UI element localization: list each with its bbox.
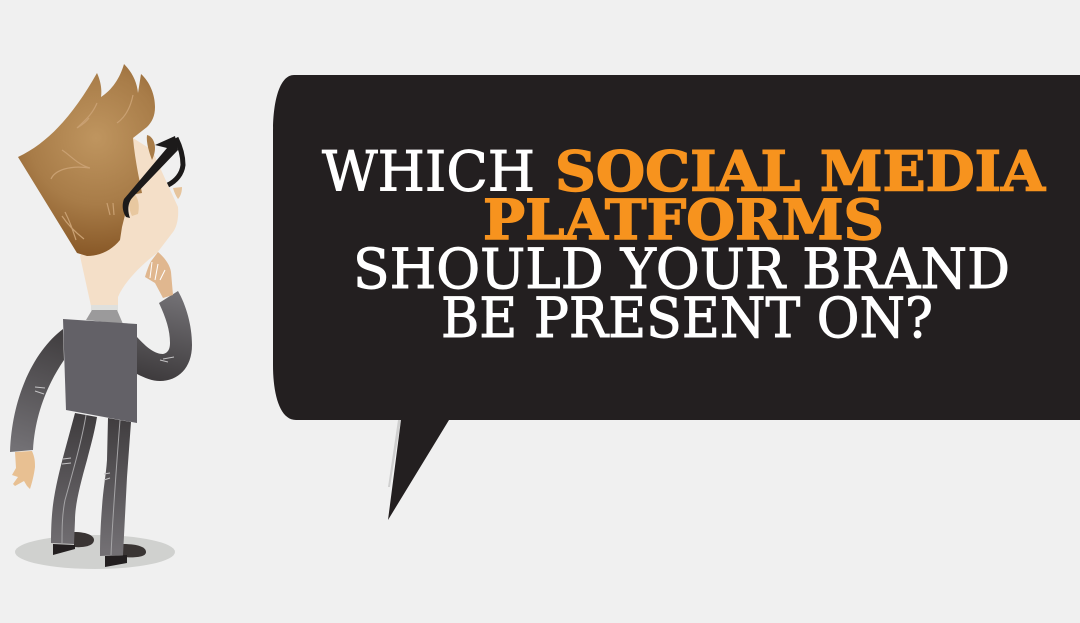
- left hand: [12, 451, 35, 489]
- title: [322, 140, 1046, 351]
- neck and face: [80, 138, 178, 306]
- legs: [51, 413, 131, 556]
- title: PLATFORMS: [483, 188, 884, 253]
- nose: [173, 187, 182, 199]
- raised hand: [145, 252, 173, 298]
- title: SOCIAL MEDIA: [555, 140, 1046, 204]
- character: thinking man: [10, 64, 192, 569]
- left arm: [10, 329, 64, 452]
- title: BE PRESENT ON?: [441, 286, 933, 351]
- title: WHICH: [322, 140, 535, 204]
- ear: [129, 193, 139, 216]
- shoes: [53, 532, 146, 567]
- hair: [18, 64, 155, 256]
- speech bubble: [273, 75, 1080, 520]
- shirt: [86, 310, 123, 324]
- eyebrow: [147, 135, 155, 160]
- shirt collar: [91, 305, 118, 311]
- right arm: [137, 291, 192, 381]
- glasses: [123, 136, 183, 218]
- ground shadow: [15, 535, 175, 569]
- vest: [63, 319, 137, 423]
- title: SHOULD YOUR BRAND: [353, 237, 1010, 302]
